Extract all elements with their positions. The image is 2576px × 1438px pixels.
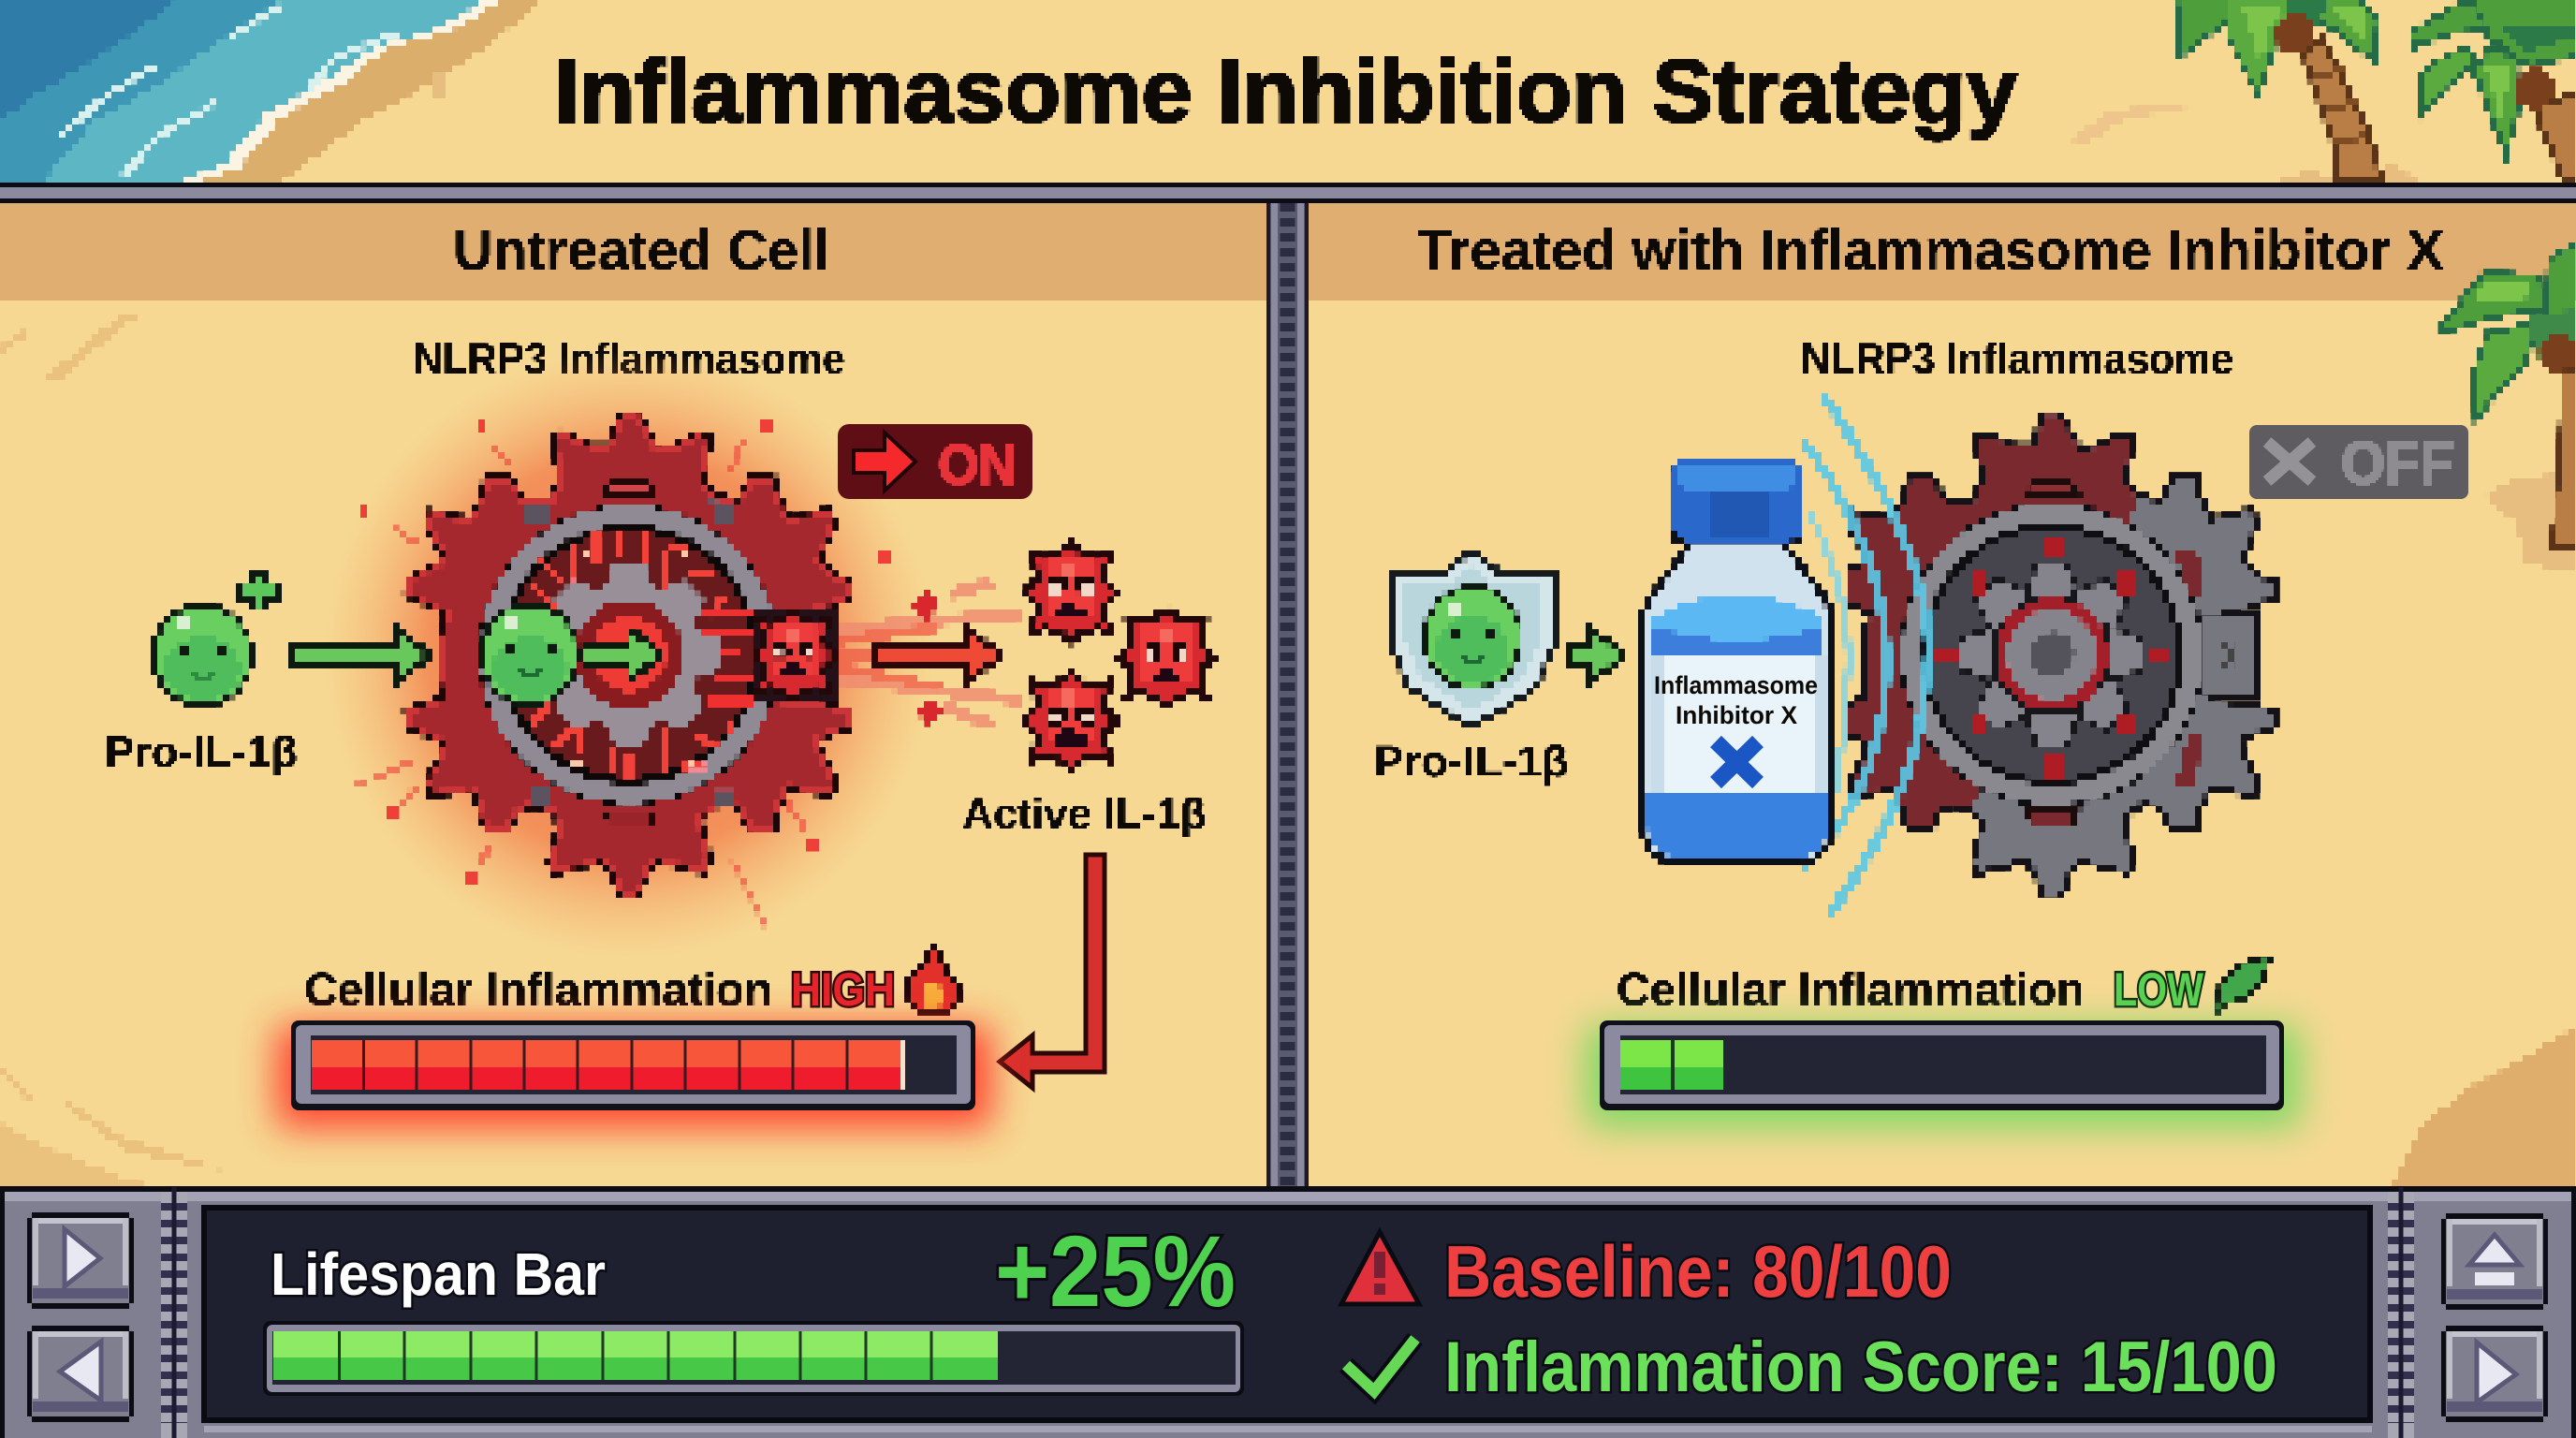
red sparks [356,418,890,930]
sand patch bottom right [2393,1026,2576,1187]
red glow under bar [276,1025,992,1128]
lifespan value: +25% [995,1214,1236,1328]
bottle label text: Inflammasome [1654,671,1818,699]
bottom control panel [0,1186,2576,1438]
arrow: output red arrow [877,629,1002,682]
beach corner with ocean waves [0,0,542,183]
button: play left [27,1326,134,1422]
icon: check mark [1346,1339,1415,1391]
on status badge [838,424,1032,499]
active il-1b enemies [1024,544,1213,770]
baseline readout: Baseline: 80/100 [1444,1230,1952,1313]
button: play right [27,1212,134,1309]
red output streaks [838,582,1025,726]
icon: flame [907,944,959,1013]
top frame bar [0,183,2576,203]
inflammasome label left: NLRP3 Inflammasome [413,334,845,383]
arrow: input to inflammasome [291,629,431,682]
on status badge: ON [938,433,1017,496]
inflammasome label right: NLRP3 Inflammasome [1801,334,2233,383]
title: Inflammasome Inhibition Strategy [554,41,2017,141]
label: pro-il-1b right: Pro-IL-1β [1374,737,1569,785]
arrow: inner green arrow [583,628,662,682]
dark display panel [204,1208,2370,1420]
inflammation bar high [291,1020,975,1110]
palm tree two [2410,0,2576,183]
inner slime [479,602,580,707]
bottle label text: Inhibitor X [1676,701,1797,729]
active NLRP3 gear [409,416,849,895]
button: up [2441,1213,2548,1310]
sand ripple top [2073,103,2190,145]
arrow: shield to bottle [1569,629,1626,682]
sand marks left [0,312,220,1187]
label: lifespan bar: Lifespan Bar [271,1240,606,1308]
inflammation bar low [1600,1020,2284,1110]
panel header: untreated [0,203,1266,301]
frame [0,1186,2576,1438]
left chain divider [161,1187,187,1438]
bottle X mark [1716,741,1758,783]
center divider [1266,203,1309,1187]
label: cellular inflammation high: HIGH [791,963,895,1016]
right chain divider [2388,1187,2414,1438]
button: next [2441,1326,2548,1422]
label: active il-1b: Active IL-1β [962,789,1207,838]
panel: treated cell [1309,203,2576,1187]
red glow behind active gear [325,350,933,959]
icon: leaf [2215,957,2269,1013]
label: cellular inflammation low: Cellular Inflammation [1617,963,2085,1016]
arrow: il-1b to inflammation [1000,855,1105,1088]
small red particles [914,592,942,726]
heading: treated with inhibitor: Treated with Inflammasome Inhibitor X [1417,219,2444,282]
panel: untreated cell [0,203,1266,1187]
lifespan progress bar [263,1321,1244,1396]
palm tree three [2443,243,2576,574]
green glow under bar [1585,1025,2301,1128]
inflammation score readout: Inflammation Score: 15/100 [1444,1328,2277,1407]
blue inhibition waves [1807,398,1928,913]
inactive NLRP3 gear [1848,413,2280,898]
heading: untreated cell: Untreated Cell [453,219,829,282]
icon: shielded slime [1391,550,1555,727]
icon: warning triangle [1341,1232,1419,1304]
bottle label text [1654,671,1818,729]
panel header: treated [1309,203,2576,301]
label: cellular inflammation low: LOW [2114,963,2204,1016]
label: cellular inflammation high: Cellular Inflammation [304,963,772,1016]
inhibitor bottle [1644,459,1831,861]
palm tree one [2176,0,2424,183]
icon: pro-il-1b slime with plus [151,569,279,708]
off status badge [2249,425,2468,499]
off status badge: OFF [2341,428,2454,497]
label: pro-il-1b left: Pro-IL-1β [105,727,298,776]
